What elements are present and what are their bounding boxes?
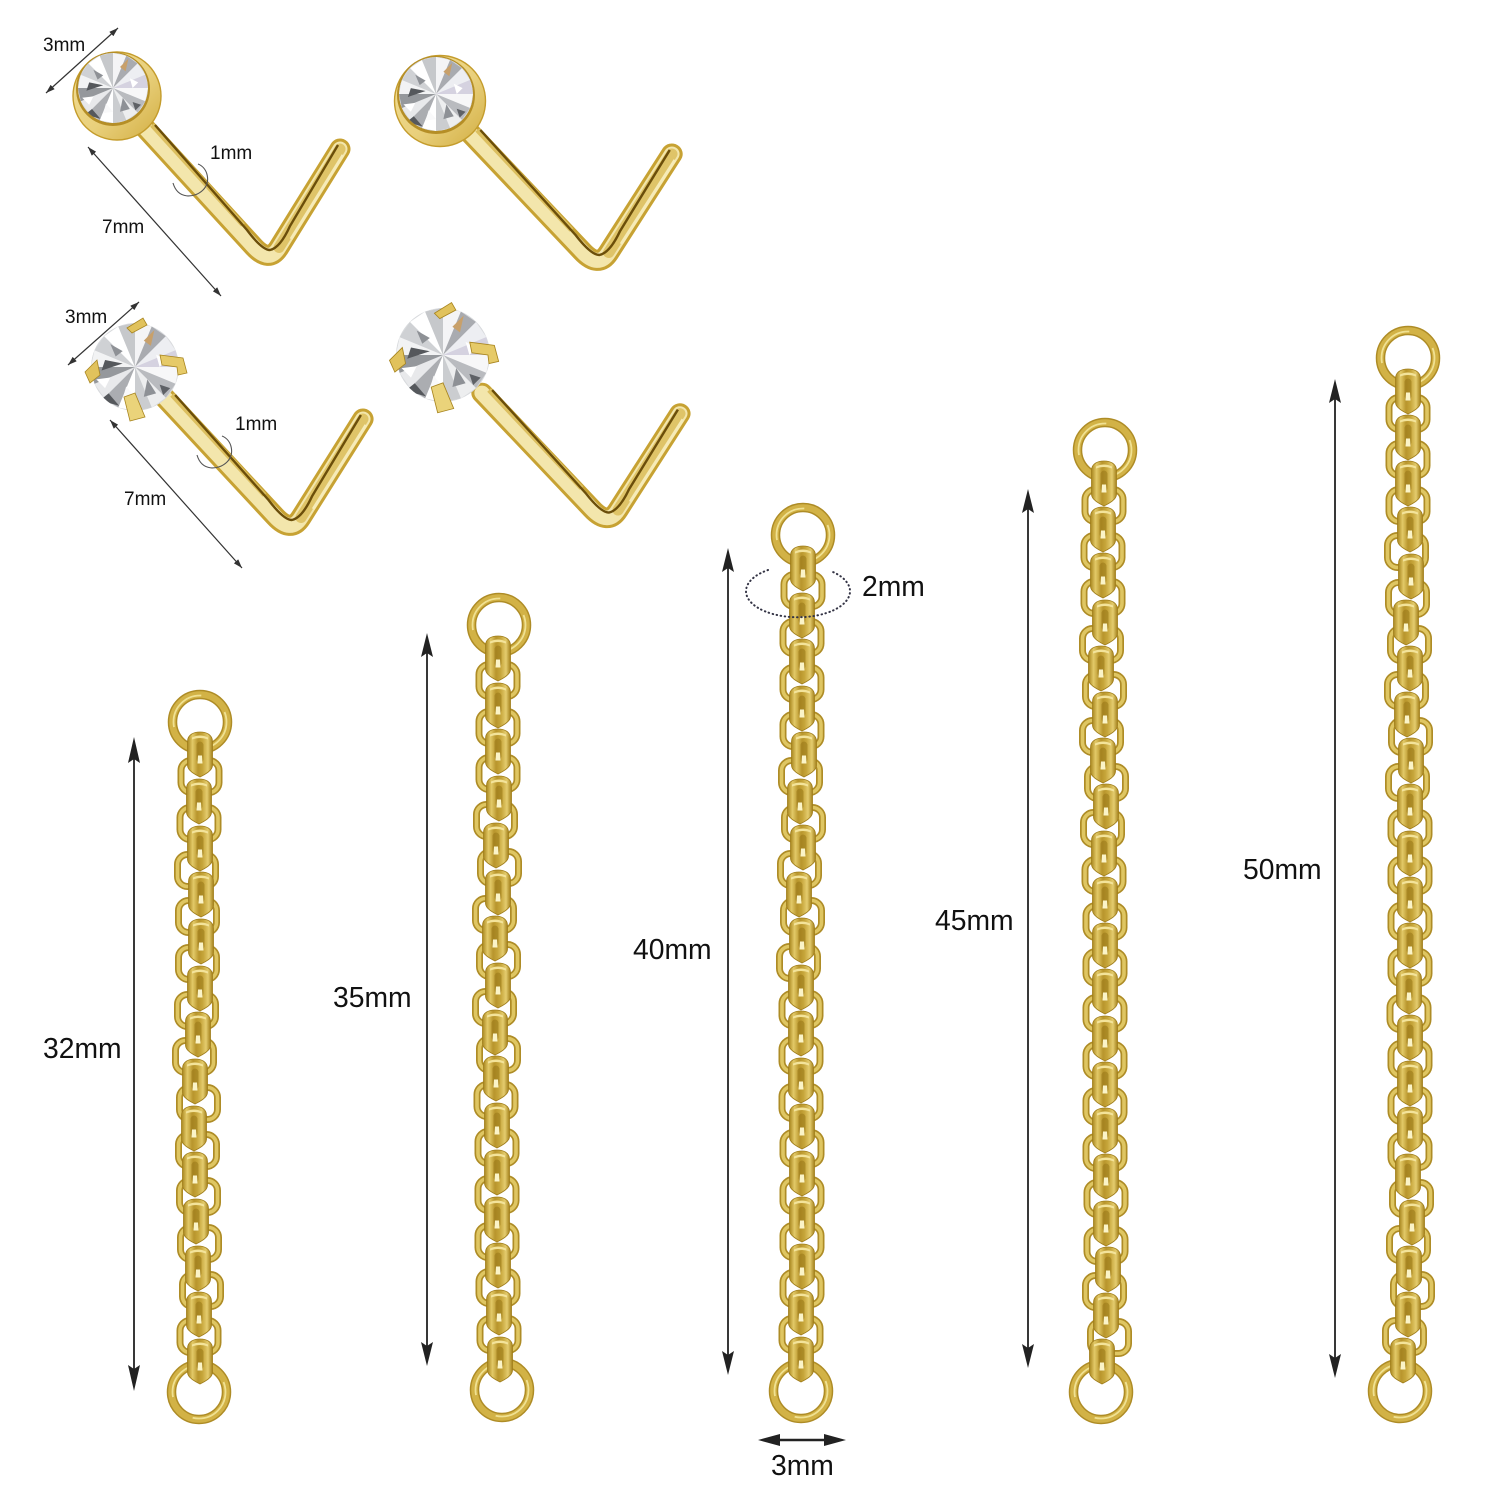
stud 4 L-shaped post	[482, 390, 683, 518]
arrow: 50mm length	[1329, 379, 1341, 1378]
label 40mm: 40mm	[633, 933, 712, 965]
stud 3 prongs and crystal	[85, 318, 187, 421]
label 35mm: 35mm	[333, 981, 412, 1013]
stud 1 label 1mm: 1mm	[210, 143, 252, 164]
arrow: 40mm length	[722, 548, 734, 1375]
nose stud 3: prong set, with dimensions	[65, 302, 366, 568]
stud 3 L-shaped post	[165, 395, 366, 525]
stud 2 bezel and crystal	[394, 56, 486, 146]
label 45mm: 45mm	[935, 904, 1014, 936]
chain 45mm	[1074, 422, 1132, 1420]
chain 40mm	[774, 508, 830, 1418]
callout: 3mm ring width: 3mm	[771, 1449, 834, 1481]
callout: 2mm link width	[746, 570, 925, 617]
label 50mm: 50mm	[1243, 853, 1322, 885]
label 32mm: 32mm	[43, 1032, 122, 1064]
stud 3 label 1mm	[197, 414, 277, 468]
stud 1 bezel and crystal	[73, 52, 161, 140]
stud 2 L-shaped post	[470, 130, 675, 260]
stud 3 label 7mm	[110, 420, 242, 568]
stud 4 prongs and crystal	[390, 303, 499, 413]
stud 1 label 3mm: 3mm	[43, 35, 85, 56]
callout: 2mm link width: 2mm	[862, 570, 925, 602]
chain 50mm	[1372, 330, 1436, 1418]
stud 1 label 3mm	[43, 28, 118, 93]
nose stud 2: bezel set	[394, 56, 675, 260]
nose stud 1: bezel set, with dimensions	[43, 28, 343, 296]
callout: 3mm ring width	[758, 1434, 846, 1481]
stud 3 label 7mm: 7mm	[124, 489, 166, 510]
stud 1 label 1mm	[173, 143, 252, 196]
stud 1 label 7mm: 7mm	[102, 217, 144, 238]
stud 3 label 1mm: 1mm	[235, 414, 277, 435]
stud 3 label 3mm: 3mm	[65, 307, 107, 328]
arrow: 32mm length	[128, 737, 140, 1391]
chain 35mm	[472, 598, 530, 1418]
nose stud 4: prong set	[390, 303, 683, 518]
arrow: 35mm length	[421, 633, 433, 1366]
stud 1 L-shaped post	[145, 125, 343, 255]
chain 32mm	[172, 694, 228, 1420]
stud 1 label 7mm	[88, 147, 221, 296]
stud 3 label 3mm	[65, 302, 139, 365]
arrow: 45mm length	[1022, 489, 1034, 1368]
